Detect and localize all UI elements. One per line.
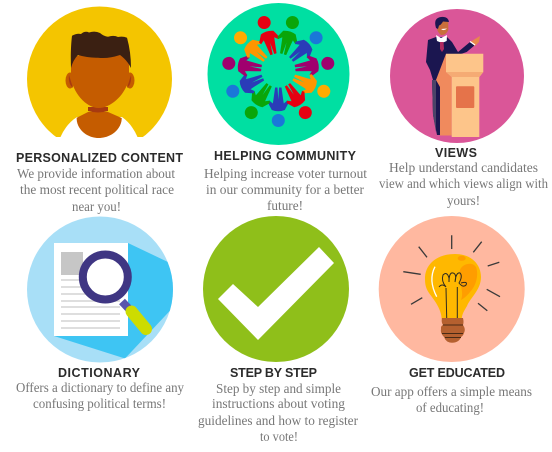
- icon: document and magnifying glass: [27, 216, 180, 362]
- panel: personalized content: [16, 6, 183, 214]
- text block: instructions about voting: [212, 396, 345, 411]
- panel: step by step: [198, 216, 358, 444]
- icon: ring of people: [208, 3, 350, 145]
- text block: [379, 160, 548, 208]
- text block: to vote!: [260, 429, 298, 444]
- text block: Step by step and simple: [216, 381, 341, 396]
- text block: Helping increase voter turnout: [204, 166, 367, 181]
- text block: We provide information about: [17, 166, 175, 181]
- panel: get educated: [371, 216, 532, 415]
- panel: dictionary: [16, 216, 184, 411]
- text block: confusing political terms!: [33, 396, 166, 411]
- heading: STEP BY STEP: [230, 366, 317, 380]
- panel: views: [379, 9, 548, 208]
- heading: HELPING COMMUNITY: [214, 149, 357, 163]
- text block: yours!: [447, 193, 480, 208]
- icon: light bulb: [379, 216, 525, 362]
- text block: [371, 384, 532, 415]
- text block: [204, 166, 367, 213]
- panel: helping community: [204, 3, 367, 213]
- heading: DICTIONARY: [58, 366, 141, 380]
- heading: VIEWS: [435, 146, 477, 160]
- text block: near you!: [72, 199, 121, 214]
- text block: guidelines and how to register: [198, 413, 358, 428]
- text block: Our app offers a simple means: [371, 384, 532, 399]
- text block: view and which views align with: [379, 176, 548, 191]
- heading: PERSONALIZED CONTENT: [16, 151, 183, 165]
- icon: person avatar: [27, 6, 172, 160]
- text block: Offers a dictionary to define any: [16, 380, 184, 395]
- text block: [198, 381, 358, 444]
- icon: speaker at podium: [390, 9, 524, 143]
- heading: GET EDUCATED: [409, 366, 505, 380]
- text block: [17, 166, 175, 214]
- text block: [16, 380, 184, 411]
- text block: in our community for a better: [206, 182, 364, 197]
- text block: future!: [267, 198, 303, 213]
- text block: Help understand candidates: [389, 160, 538, 175]
- text block: the most recent political race: [20, 182, 174, 197]
- icon: check mark: [203, 216, 349, 362]
- text block: of educating!: [416, 400, 484, 415]
